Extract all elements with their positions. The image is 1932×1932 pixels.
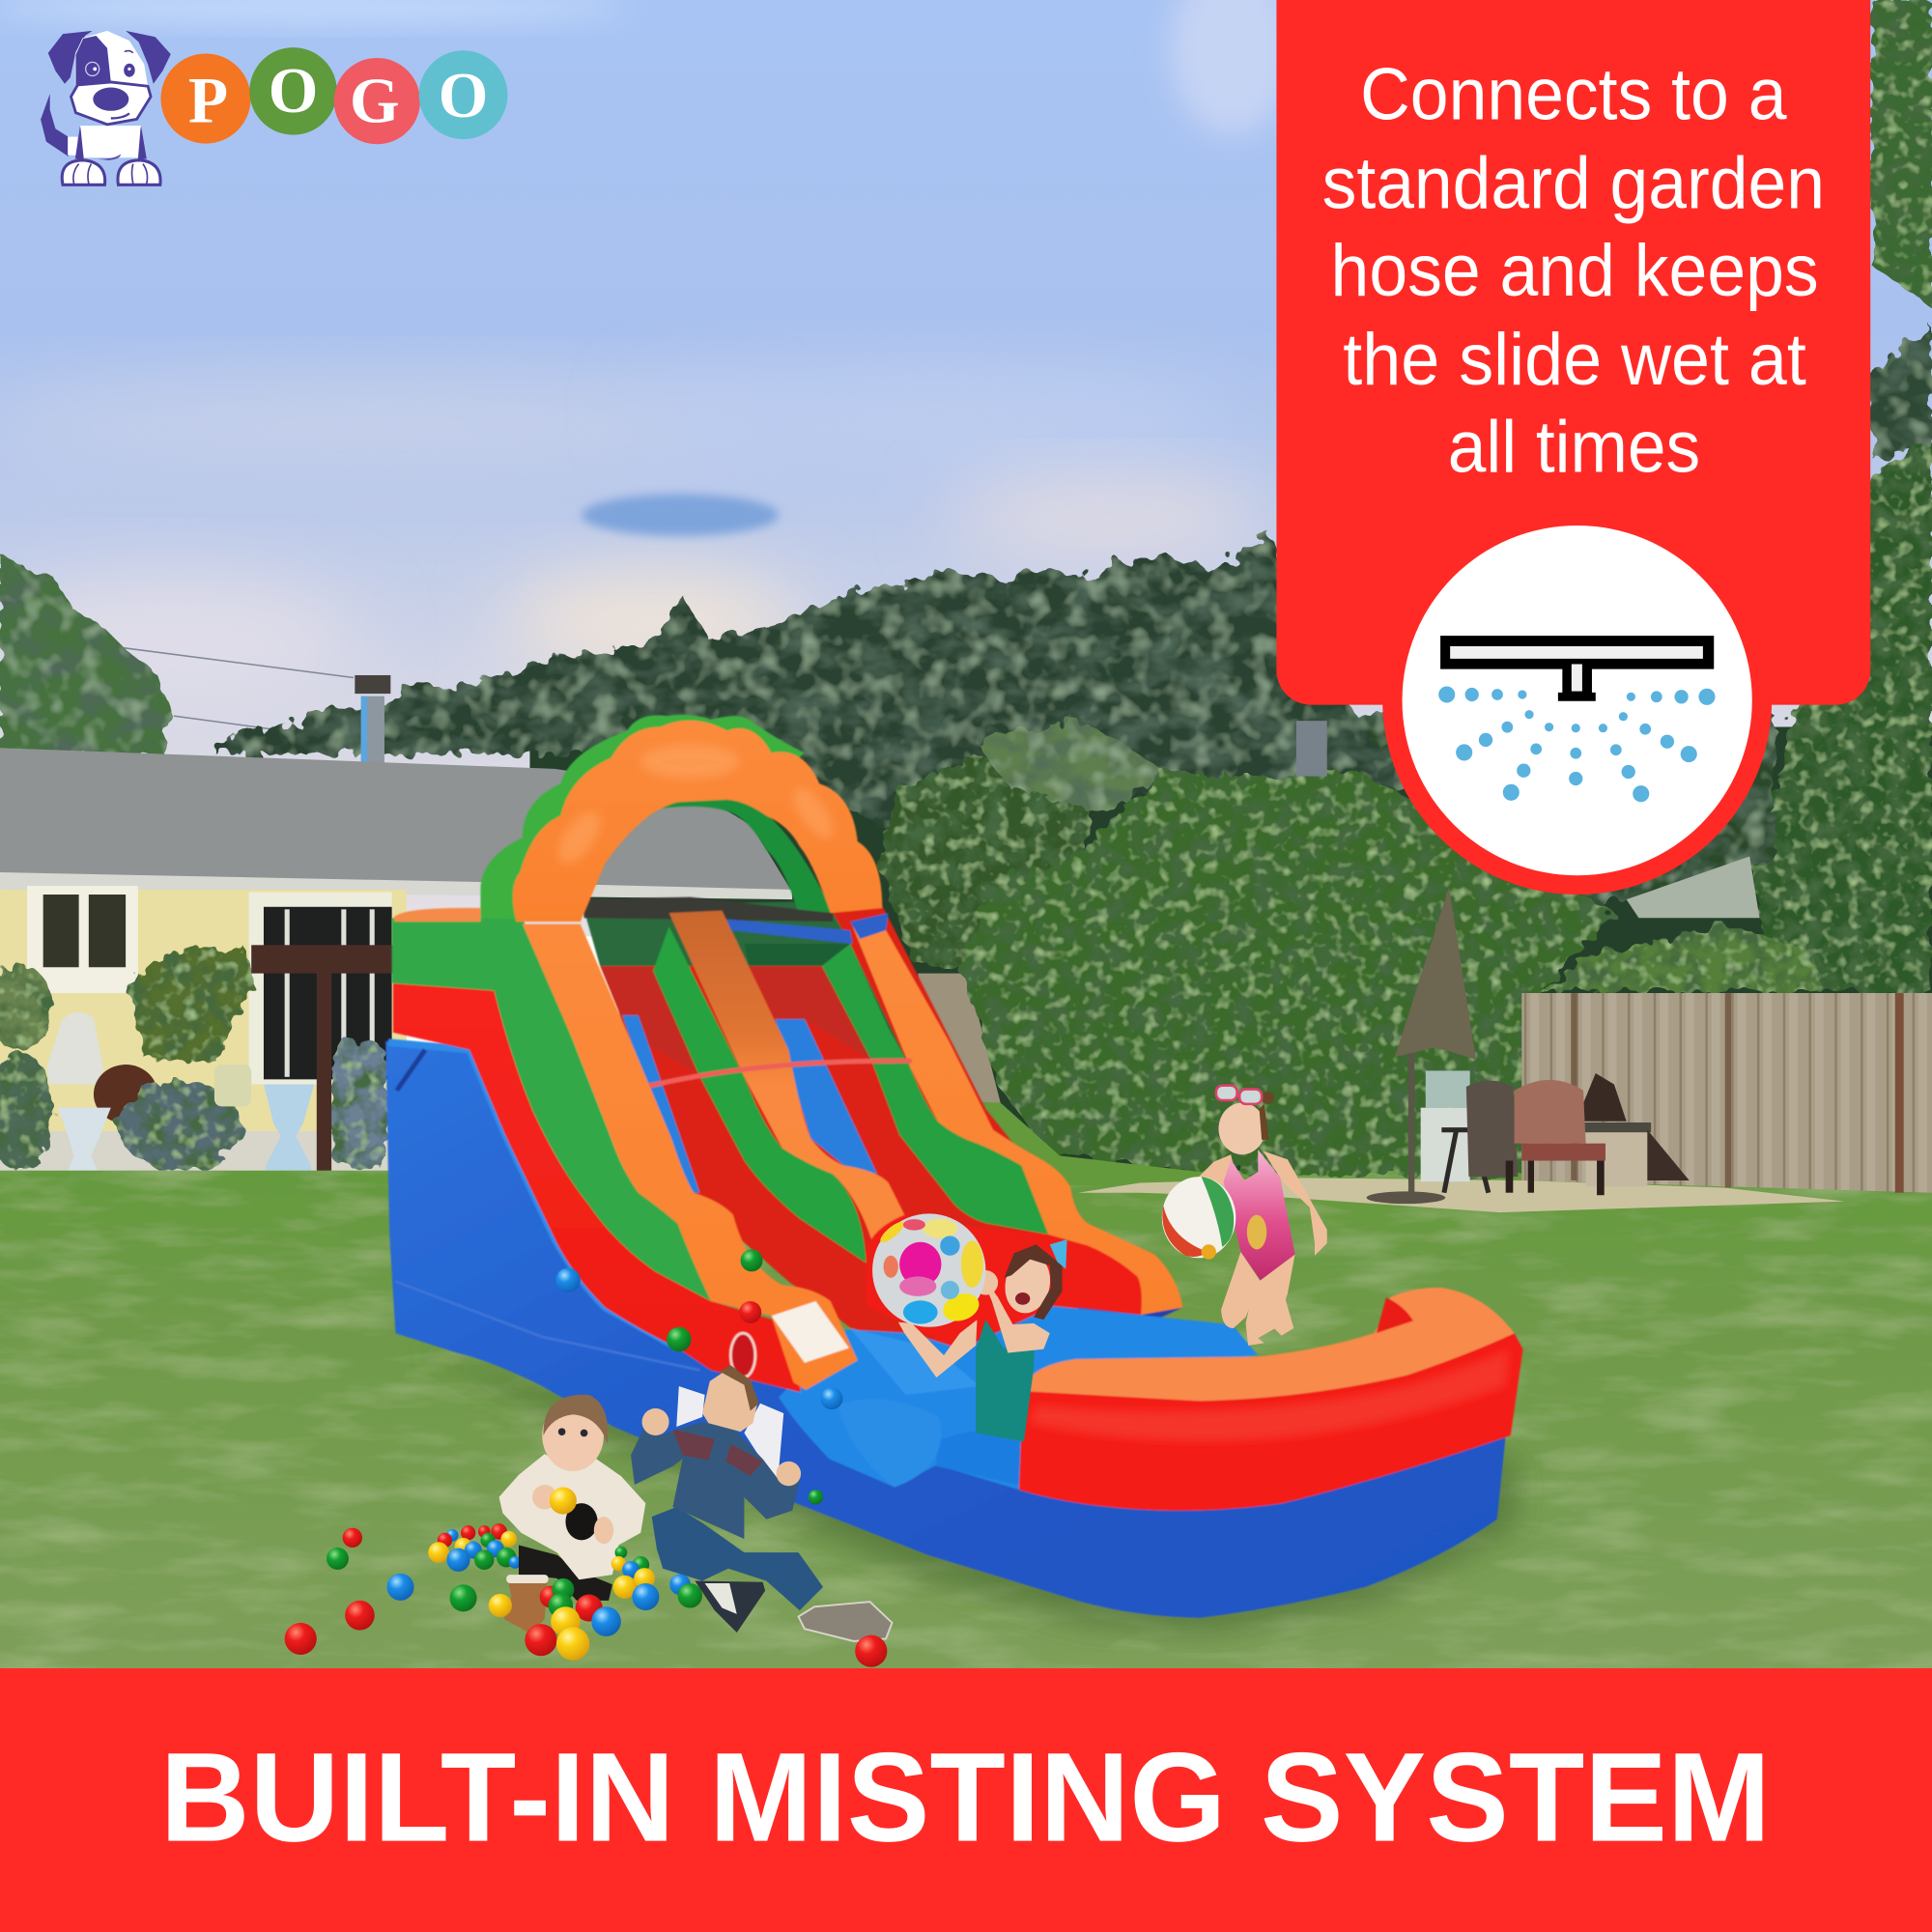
patio [1078,1178,1844,1212]
arch [480,715,882,922]
body [75,126,146,157]
window [27,886,138,993]
letter P: P [188,64,228,136]
head [702,1369,757,1432]
callout text: the slide wet at [1343,319,1806,401]
green outer scallops [480,715,805,922]
scattered balls [285,1249,887,1667]
muzzle [71,82,151,125]
dark backdrop behind garden [529,727,1932,1182]
hands [532,1485,613,1544]
banner background [0,1668,1932,1932]
bow [1050,1239,1067,1269]
callout text: all times [1448,407,1700,489]
pineapple print [1247,1215,1266,1249]
right trees [1749,431,1932,992]
goggles [1216,1086,1262,1104]
right hydrangea [330,1041,387,1168]
letter O: O [269,56,318,127]
tail [41,94,71,156]
paws [62,160,160,185]
rope and net strap [645,913,912,1087]
hair [1005,1244,1062,1320]
vine bush [127,949,251,1061]
limbs [1199,1151,1327,1346]
forested hill [215,532,1405,826]
teal swimsuit [976,1320,1035,1441]
hair [720,1365,759,1410]
sky [0,0,1932,936]
pool wall orange [1023,1288,1515,1401]
letter O [419,50,508,139]
right green stripe [822,944,1048,1235]
hair [1260,1104,1269,1140]
wooden fence left [918,974,1001,1103]
leggings [519,1545,612,1601]
clear ball [872,1213,985,1327]
right arm and shoulder [979,1269,1050,1353]
shirt [631,1422,800,1539]
paved ground [0,1131,394,1173]
house [0,748,792,1173]
hands [642,1408,801,1486]
nose [93,88,128,111]
middle hydrangea [118,1082,242,1171]
pergola [251,945,393,1193]
green left band [392,918,711,1301]
green inner band [644,796,833,913]
right ear [126,31,171,84]
white rump [68,137,77,156]
right red lip [866,1215,1142,1348]
right blue lane [775,1019,877,1175]
red logo [730,1333,755,1378]
letter O [249,47,337,135]
inflatable water slide [385,715,1523,1634]
grass strip by hedge [918,1099,1233,1185]
left hydrangea [0,1052,54,1171]
right upper net [744,944,911,1068]
letter G: G [350,66,400,136]
left blue lane [622,1015,699,1193]
red panel [1276,0,1870,705]
head [75,31,148,86]
eyes [558,1428,587,1436]
eave [0,872,792,899]
blue base [385,1041,1506,1618]
mouth [1015,1293,1030,1305]
lip shadow [1077,1307,1182,1324]
callout text: standard garden [1322,143,1825,225]
right lane shade [750,966,871,1060]
dog mascot [41,31,171,185]
slide interior [582,897,1182,1348]
patio umbrella [1367,887,1476,1204]
girl with clear ball [872,1213,1067,1441]
arch highlights [550,744,840,870]
callout text [1322,54,1825,489]
toes [73,164,148,184]
mouth [111,113,129,118]
swimsuit [1224,1150,1295,1280]
boy sitting [631,1365,892,1641]
pool wall red inner end [1377,1297,1413,1333]
back fence [1521,993,1932,1193]
wall basin [46,1012,103,1084]
center orange stripe [669,911,904,1260]
blue urn [261,1084,314,1203]
callout text: hose and keeps [1331,230,1819,312]
left ear [48,31,93,84]
hand [974,1270,998,1295]
boot fur [506,1575,549,1583]
background bush [877,754,1091,974]
left top sliver [394,908,480,922]
icon: mister nozzle [1438,636,1716,802]
left shrub [0,966,54,1050]
icon: water droplets [1438,686,1716,802]
paper right [744,1404,783,1485]
hair bun [1262,1092,1274,1104]
shoe sole [799,1602,892,1641]
hair [543,1395,608,1444]
side table [1441,1130,1493,1193]
garden shrubs and urns [0,949,387,1203]
dark top strip [582,897,833,922]
pool wall highlight [1029,1350,1509,1441]
body sides [75,126,147,160]
sweater [499,1454,645,1579]
red backdrop [582,899,1182,1348]
tie rope [397,1050,425,1091]
side seam [388,1042,678,1348]
large hedge [961,770,1614,1177]
brown garden chair [94,1065,157,1123]
right orange rail [853,926,1182,1315]
face [1218,1103,1265,1154]
yellow flowers [214,1065,251,1106]
warning sign [771,1301,849,1363]
hill midground trees [974,721,1164,813]
letter G [334,58,420,144]
lower seam [395,1282,699,1370]
beach ball [1162,1177,1236,1260]
left tree [0,554,173,754]
bottom banner [0,1668,1932,1932]
upper lane shade [600,966,696,1072]
shaded back wall [582,902,850,966]
boot [504,1578,547,1634]
center green stripe [653,926,867,1263]
wall [0,890,407,1142]
face [542,1400,604,1471]
left arm [898,1320,977,1378]
pool floor [779,1306,1258,1490]
face [1000,1250,1056,1318]
sneaker laces [705,1583,737,1614]
ball pile left [428,1523,522,1572]
orange arch [513,721,882,922]
grass [0,1171,1932,1676]
sneaker [695,1580,765,1633]
letter P [160,53,251,144]
eye patch [75,36,111,85]
patio door [249,892,392,1084]
pool wall red [1019,1333,1523,1511]
overhead wires [116,647,354,729]
ground shadow [407,1346,1516,1634]
pedestal [1421,1070,1470,1181]
red left band [393,983,801,1392]
black shirt patch [565,1503,598,1540]
patio chairs and grill [1466,1073,1690,1195]
callout panel: misting feature [1276,0,1870,895]
white circle [1403,526,1752,875]
logo [41,31,508,185]
toddler sitting [499,1395,645,1634]
letter O: O [439,61,488,131]
left orange rail [523,924,858,1390]
held ball [550,1488,577,1515]
banner title: BUILT-IN MISTING SYSTEM [160,1726,1771,1868]
planter [58,1108,111,1175]
paper left [676,1386,705,1427]
girl jumping with beach ball [1162,1086,1327,1346]
roof [0,748,792,892]
jeans [652,1507,823,1610]
callout text: Connects to a [1360,54,1787,136]
pool bumps [838,1328,1023,1488]
eyes [86,51,135,77]
red circle badge [1382,505,1772,895]
plaid yoke [672,1430,763,1476]
neighbour roof and vent [1296,721,1759,918]
chimney [355,675,390,764]
